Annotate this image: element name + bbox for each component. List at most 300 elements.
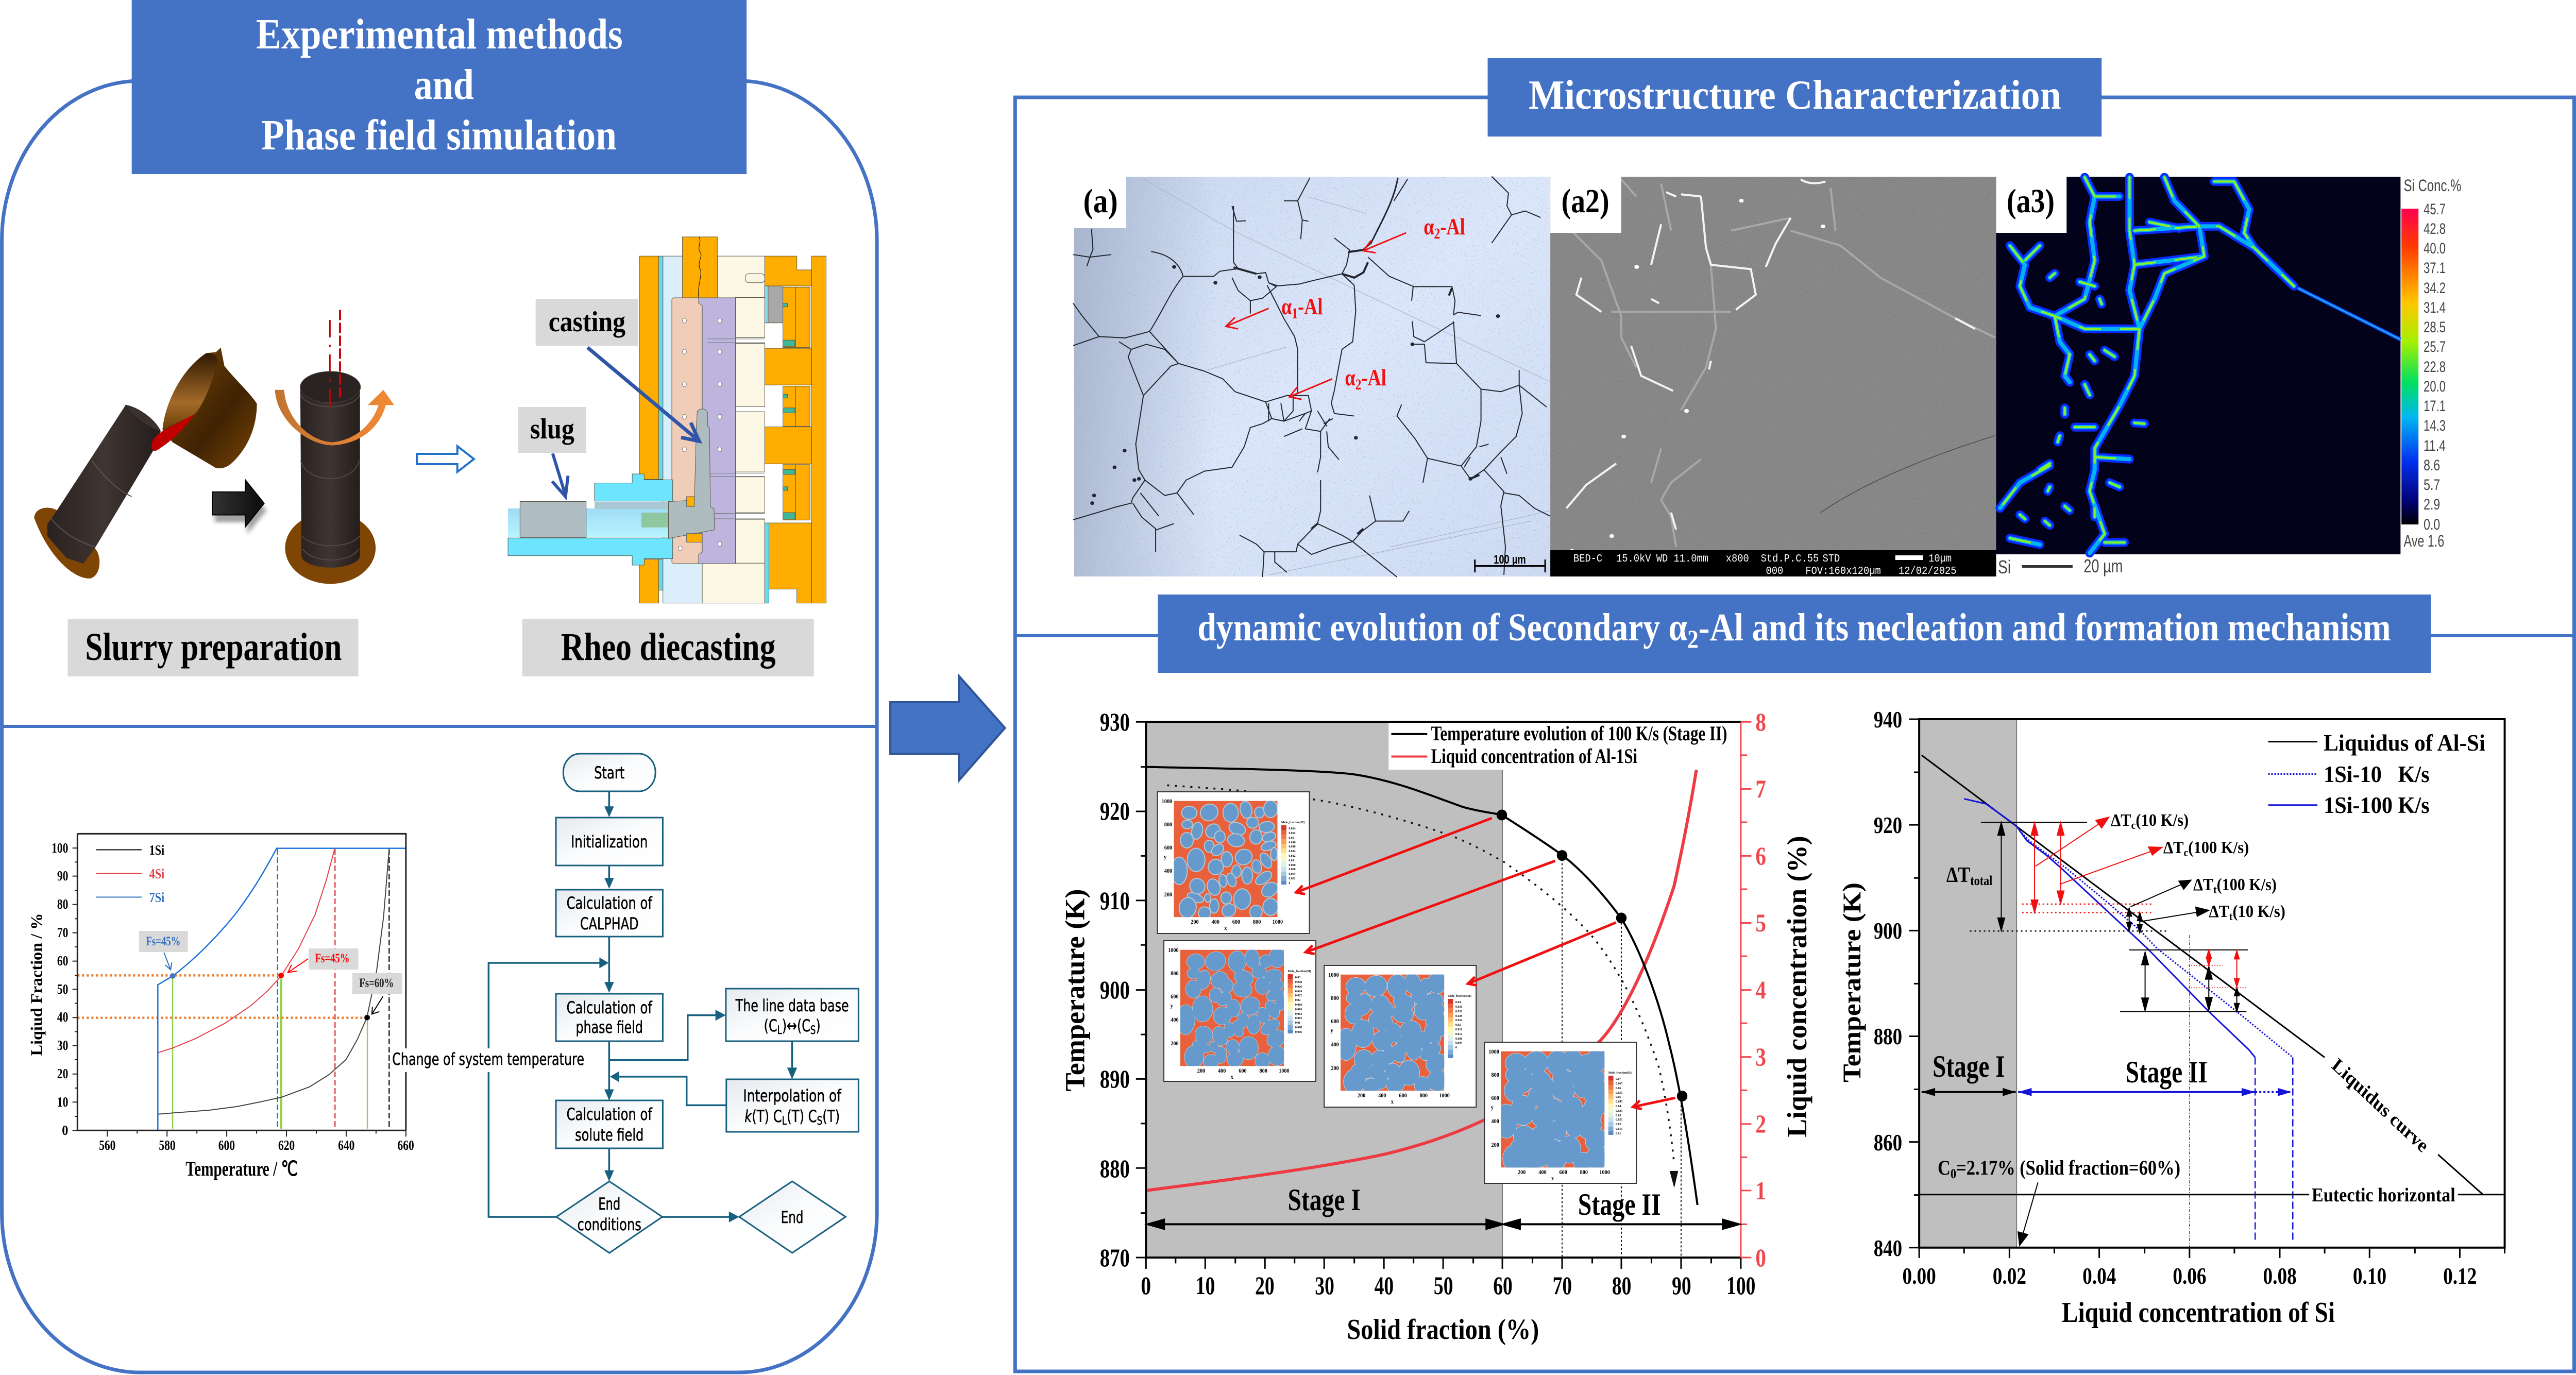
inset: solid fraction 60 percent: Mole_fraction(SI) [1281,821,1304,824]
node: calculation of solute field: solute field [575,1126,643,1145]
Si network [2000,177,2401,553]
bottom axis labels: 90 [1672,1272,1691,1300]
heading: dynamic evolution: 2 [1687,625,1699,654]
node: end conditions: conditions [578,1216,641,1234]
annotations: phase arrows: α [1281,294,1293,320]
inset: solid fraction 90 percent: x [1551,1176,1554,1182]
inset: solid fraction 60 percent: 1000 [1273,919,1283,925]
label box (a2) [1550,177,1621,233]
inset: solid fraction 70 percent: 0.01 [1295,1021,1300,1025]
inset: solid fraction 60 percent: 800 [1164,822,1173,828]
bottom axis labels: 30 [1315,1272,1334,1300]
colour bar: 8.6 [2424,457,2440,474]
colour bar: Ave 1.6 [2404,533,2444,550]
chart: liquid fraction vs temperature [28,834,414,1180]
stage spans: Stage I [1933,1049,2005,1084]
arrow: casting pointer [587,348,699,441]
annotations: phase arrows [1226,214,1465,399]
stage spans: Stage II [2126,1055,2208,1090]
bottom axis labels: 70 [1553,1272,1572,1300]
bottom axis labels: 0.06 [2173,1263,2207,1289]
inset: solid fraction 70 percent: 600 [1239,1068,1247,1074]
die halves [672,298,765,564]
inset: solid fraction 90 percent: 200 [1518,1169,1526,1176]
right axis labels: 7 [1755,775,1766,804]
inset: solid fraction 90 percent: 0.015 [1616,1127,1622,1131]
inset: solid fraction 80 percent: 600 [1331,1018,1339,1025]
panel: experimental methods and phase field simulation [2,81,877,1372]
inset: solid fraction 80 percent: 0.008 [1455,1037,1462,1041]
annotations: undercooling labels: (100 K/s) [2188,837,2249,857]
left axis labels: 930 [1100,708,1130,737]
stage spans: Stage II [1578,1187,1661,1222]
inset: solid fraction 70 percent: 0.014 [1295,1012,1302,1016]
plot area [1909,719,2505,1258]
inset: solid fraction 80 percent: 400 [1378,1093,1386,1099]
heading: experimental methods: Phase field simulation [261,111,617,159]
annotations: phase arrows: -Al [1361,365,1386,391]
left axis labels: 920 [1100,797,1130,826]
inset: solid fraction 60 percent: 0.024 [1289,827,1296,830]
node: interpolation: S [817,1114,822,1127]
heading: microstructure characterization [1488,58,2102,137]
stage spans [1922,1049,2291,1096]
inset: solid fraction 60 percent: 400 [1164,868,1173,874]
arrows: points to insets [1296,818,1675,1109]
inset: solid fraction 70 percent [1164,941,1316,1081]
colour bar: 5.7 [2424,477,2440,494]
stage spans [1148,1183,1739,1229]
left axis labels: 900 [1100,976,1130,1005]
inset: solid fraction 70 percent: 0.03 [1295,976,1300,979]
eutectic line: Eutectic horizontal [2312,1184,2455,1206]
inset: solid fraction 80 percent: 400 [1331,1042,1339,1048]
callouts: solid fraction markers [139,931,402,1014]
inset: solid fraction 80 percent: 0.028 [1455,1014,1462,1018]
bottom axis labels [1903,1263,2477,1289]
heading: microstructure characterization: Microstructure Characterization [1529,72,2061,118]
callout: C0: =2.17% (Solid fraction=60%) [1956,1157,2180,1179]
arrow: hollow process arrow [417,446,474,472]
axis tick labels [52,840,414,1153]
inset: solid fraction 60 percent: 0.016 [1289,845,1296,848]
inset: solid fraction 90 percent: 400 [1491,1118,1499,1125]
scale bar 20 um: 20 µm [2083,556,2123,576]
axis tick labels: 30 [57,1038,68,1053]
inset: solid fraction 80 percent: 0.016 [1455,1028,1462,1031]
inset: solid fraction 90 percent: 0.025 [1616,1118,1622,1122]
node: calculation of phase field [556,994,663,1041]
SEM info bar: x800 [1726,552,1749,565]
inset: solid fraction 60 percent: 400 [1211,919,1219,925]
inset: solid fraction 60 percent: 0.012 [1289,854,1296,858]
inset: solid fraction 60 percent: 0.018 [1289,841,1296,844]
micrograph (a): optical microstructure [1073,176,1552,577]
legend [1388,722,1740,770]
inset: solid fraction 70 percent: 200 [1197,1068,1206,1074]
arrow: main flow to results [890,676,1005,780]
colour bar: 22.8 [2424,359,2446,376]
bottom axis labels: 60 [1493,1272,1513,1300]
axis tick labels: 580 [159,1138,176,1153]
icon: pouring ladle [151,348,257,468]
inset: solid fraction 70 percent: 400 [1218,1068,1226,1074]
inset: solid fraction 80 percent: 0.024 [1455,1018,1463,1022]
legend: 1Si [149,842,164,858]
inset: solid fraction 80 percent: 0.036 [1455,1005,1462,1009]
left axis labels: 860 [1874,1130,1902,1156]
inset: solid fraction 60 percent: 0.022 [1289,831,1296,835]
dendrite boundaries [1566,179,1995,551]
inset: solid fraction 90 percent: 0.06 [1616,1087,1621,1090]
legend: 1Si-100 K/s [2324,792,2430,819]
left axis labels [1100,708,1130,1272]
illustration: slurry preparation crucibles [34,310,394,584]
SEM info bar: WD 11.0mm [1656,552,1708,565]
inset: solid fraction 60 percent: 0.01 [1289,859,1294,862]
annotations: phase arrows: α [1423,214,1435,240]
inset: solid fraction 90 percent: 0.04 [1616,1105,1621,1108]
left axis labels: 840 [1874,1235,1902,1262]
inset: solid fraction 70 percent: 1000 [1168,947,1179,954]
axis tick labels: 620 [278,1138,295,1153]
inset: solid fraction 90 percent: 0.055 [1616,1091,1622,1095]
flowchart: solidification simulation [391,754,858,1253]
arrow: slug pointer [552,453,568,497]
left axis labels: 880 [1874,1024,1902,1050]
inset: solid fraction 80 percent: 800 [1420,1093,1428,1099]
shot sleeve and slug [508,409,715,565]
node: line data base: L [777,1024,782,1037]
colour bar: 25.7 [2424,338,2446,355]
label: casting: casting [549,307,625,338]
panel: microstructure and mechanism frame [1015,97,2574,1371]
scale bar 20 um: Si [1998,557,2011,578]
node: initialization: Initialization [571,833,648,852]
inset: solid fraction 90 percent: 0.01 [1616,1132,1621,1135]
left axis labels: 920 [1874,812,1902,839]
inset: solid fraction 80 percent: 800 [1331,995,1339,1001]
bottom axis labels [1141,1272,1755,1300]
inset: solid fraction 80 percent: x [1391,1099,1394,1105]
inset: solid fraction 90 percent: 400 [1538,1169,1547,1176]
label: casting [536,299,638,346]
inset: solid fraction 80 percent: 0.02 [1455,1023,1461,1027]
micrograph (a2): SEM image [1550,177,1996,577]
inset: solid fraction 80 percent: 200 [1331,1065,1339,1072]
bottom axis labels: 0.08 [2263,1263,2297,1289]
inset: solid fraction 70 percent: Mole_fraction(SI) [1288,970,1311,973]
colour bar: Si Conc.% [2404,177,2461,195]
colour bar: 34.2 [2424,280,2446,297]
annotations: undercooling labels: ΔT [2209,901,2229,921]
colour bar: 37.1 [2424,260,2446,277]
SEM info bar: 10µm [1928,552,1952,565]
SEM info bar: 000 [1766,565,1783,577]
bottom axis labels: 50 [1434,1272,1453,1300]
axis title: temperature K: Temperature (K) [1060,889,1091,1092]
heading: dynamic evolution: -Al and its necleation and formation mechanism [1699,606,2391,649]
left axis labels [1874,707,1902,1262]
axis tick labels: 90 [57,868,68,884]
inset: solid fraction 70 percent: 0.024 [1295,990,1302,993]
inset: solid fraction 70 percent: 400 [1171,1017,1179,1023]
node: calculation of CALPHAD [556,890,663,937]
legend: 1Si-10 K/s [2324,761,2430,788]
loop label: change of system temperature [391,1048,586,1072]
node: interpolation: (T) C [787,1108,817,1126]
axis tick labels: 80 [57,896,68,912]
bottom axis labels: 10 [1196,1272,1215,1300]
inset: solid fraction 70 percent: 0.02 [1295,998,1300,1002]
node: start [563,754,655,791]
right axis labels: 4 [1755,976,1766,1005]
colour bar: 17.1 [2424,398,2446,415]
left axis labels: 870 [1100,1244,1130,1272]
label: rheo diecasting [522,619,814,676]
inset: solid fraction 60 percent: 200 [1191,919,1199,925]
inset: solid fraction 70 percent: y [1171,1003,1173,1009]
callouts: solid fraction markers: Fs=45% [146,935,180,948]
inset: solid fraction 60 percent: 0.008 [1289,863,1296,867]
icon: upright crucible [285,310,376,584]
SEM info bar: FOV:160x120µm [1805,565,1881,577]
node: initialization [556,818,663,865]
axis tick labels: 0 [62,1123,68,1138]
annotations: undercooling labels: ΔT [1946,863,1972,887]
node: line data base: (C [764,1017,780,1036]
node: interpolation [726,1079,858,1132]
inset: solid fraction 90 percent: 600 [1559,1169,1567,1176]
colour bar: 31.4 [2424,299,2446,316]
inset: solid fraction 70 percent: 0.022 [1295,994,1302,997]
icon: tilted crucible [34,405,161,579]
annotations: undercooling labels: c [2184,846,2188,859]
colour bar: 20.0 [2424,378,2446,395]
axis tick labels: 40 [57,1009,68,1025]
legend: Liquid concentration of Al-1Si [1431,745,1637,768]
colour bar [2401,177,2461,550]
callout: C0: 0 [1951,1167,1956,1181]
node: interpolation: L [782,1114,787,1127]
bottom axis labels: 0.00 [1903,1263,1936,1289]
inset: solid fraction 90 percent: 0.03 [1616,1114,1621,1117]
inset: solid fraction 80 percent: 0.032 [1455,1010,1462,1013]
annotations: undercooling labels: t [2213,883,2217,896]
inset: solid fraction 90 percent: 600 [1491,1095,1499,1101]
inset: solid fraction 90 percent [1484,1042,1636,1183]
colour bar: 28.5 [2424,319,2446,336]
axis tick labels: 640 [338,1138,354,1153]
node: end conditions: End [598,1195,620,1214]
inset: solid fraction 60 percent: 0.014 [1289,850,1296,853]
right axis labels: 3 [1755,1043,1766,1072]
panel letter (a2): (a2) [1562,182,1609,220]
colour bar: 40.0 [2424,240,2446,257]
inset: solid fraction 90 percent: 0.045 [1616,1100,1622,1104]
label: slurry preparation [67,619,359,676]
inset: solid fraction 80 percent: y [1331,1028,1333,1034]
plot area [73,834,406,1136]
inset: solid fraction 70 percent: 0.026 [1295,985,1302,989]
axis tick labels: 60 [57,953,68,969]
inset: solid fraction 80 percent: 0.004 [1455,1041,1463,1045]
inset: solid fraction 90 percent: 200 [1491,1142,1499,1148]
inset: solid fraction 70 percent: 0.012 [1295,1016,1302,1020]
annotations: undercooling labels: (100 K/s) [2217,874,2277,894]
inset: solid fraction 60 percent: 0.002 [1289,877,1296,880]
loop label: change of system temperature: Change of system temperature [392,1050,584,1069]
node: line data base [726,989,858,1041]
inset: solid fraction 70 percent: 0.006 [1295,1030,1302,1034]
annotations: undercooling labels: t [2229,910,2233,923]
annotations: phase arrows: α [1345,365,1357,391]
inset: solid fraction 60 percent: x [1224,925,1227,931]
left axis labels: 890 [1100,1065,1130,1094]
inset: solid fraction 60 percent [1158,792,1310,933]
right axis labels: 8 [1755,708,1766,737]
legend: 7Si [149,890,164,905]
inset: solid fraction 60 percent: y [1164,854,1167,860]
node: interpolation: (T) [822,1108,840,1126]
inset: solid fraction 90 percent: 800 [1580,1169,1588,1176]
label: rheo diecasting: Rheo diecasting [561,625,775,669]
node: calculation of CALPHAD: Calculation of [567,894,653,913]
inset: solid fraction 70 percent: 0.018 [1295,1003,1302,1007]
axis tick labels: 50 [57,981,68,997]
inset: solid fraction 60 percent: 600 [1164,845,1173,851]
inset: solid fraction 70 percent: 1000 [1279,1068,1290,1074]
annotations: undercooling labels: (10 K/s) [2136,810,2189,829]
inset: solid fraction 60 percent: 0 [1289,881,1290,885]
connectors [488,791,797,1223]
bottom axis labels: 20 [1255,1272,1275,1300]
right axis labels: 0 [1755,1244,1766,1272]
inset: solid fraction 80 percent: 0 [1455,1046,1457,1049]
right axis labels: 5 [1755,909,1766,938]
inset: solid fraction 60 percent: 800 [1253,919,1261,925]
label: slug: slug [530,414,574,445]
colour bar: 45.7 [2424,201,2446,218]
right axis labels: 2 [1755,1110,1766,1139]
right axis labels: 1 [1755,1177,1766,1206]
inset: solid fraction 90 percent: 0.02 [1616,1123,1621,1126]
annotations: undercooling labels [1946,810,2285,923]
annotations: phase arrows: -Al [1440,214,1465,240]
inset: solid fraction 60 percent: 200 [1164,892,1173,898]
chart: temperature vs liquid concentration of Si [1838,707,2505,1329]
bottom axis labels: 0.12 [2443,1263,2477,1289]
inset: solid fraction 70 percent: 200 [1171,1041,1179,1047]
axis tick labels: 660 [398,1138,414,1153]
node: end conditions [556,1181,663,1253]
SEM info bar: Std.P.C.55 [1761,552,1819,565]
right axis labels: 6 [1755,842,1766,871]
colour bar: 42.8 [2424,220,2446,237]
left axis labels: 900 [1874,918,1902,944]
stage spans: Stage I [1288,1183,1361,1217]
inset: solid fraction 90 percent: 0.035 [1616,1109,1622,1113]
callout: C0: C [1938,1157,1951,1179]
chart: temperature and liquid concentration vs solid fraction [1060,708,1812,1346]
node: interpolation: k(T) C [744,1108,787,1126]
heading: experimental methods: Experimental methods [256,10,623,58]
arrow: black process arrow [212,480,266,534]
annotations: undercooling labels: ΔT [2193,874,2213,894]
heading: dynamic evolution [1158,595,2431,673]
inset: solid fraction 90 percent: 800 [1491,1072,1499,1078]
scale bar 100 um [1475,552,1545,572]
legend [2268,730,2485,819]
node: start: Start [594,764,624,783]
inset: solid fraction 80 percent: 0.04 [1455,1000,1461,1004]
inset: solid fraction 90 percent: 1000 [1599,1169,1610,1176]
axis tick labels: 10 [57,1094,68,1110]
node: line data base: The line data base [735,997,849,1015]
inset: solid fraction 60 percent: 1000 [1162,799,1173,805]
inset: solid fraction 90 percent: Mole_fraction(SI) [1608,1071,1632,1075]
annotations: undercooling labels: (10 K/s) [2233,901,2285,921]
node: calculation of solute field: Calculation of [567,1106,653,1124]
axis title: liquid concentration: Liquid concentration (%) [1782,836,1812,1138]
node: line data base: S [810,1024,816,1037]
inset: solid fraction 90 percent: 0.07 [1616,1077,1621,1081]
inset: solid fraction 80 percent: 1000 [1328,972,1339,978]
inset: solid fraction 70 percent: 800 [1259,1068,1267,1074]
node: calculation of phase field: Calculation of [567,999,653,1017]
heading: dynamic evolution: dynamic evolution of Secondary α [1197,606,1705,649]
plot area [1136,722,1751,1269]
legend: Liquidus of Al-Si [2324,730,2485,756]
axis tick labels: 100 [52,840,68,856]
annotations: undercooling labels: c [2131,819,2136,831]
node: calculation of CALPHAD: CALPHAD [580,915,638,933]
inset: solid fraction 80 percent: 200 [1358,1093,1366,1099]
scale bar 100 um: 100 µm [1494,552,1526,566]
axis title: temperature: Temperature / ℃ [185,1158,298,1180]
inset: solid fraction 60 percent: 600 [1232,919,1241,925]
inset: solid fraction 80 percent: 0.012 [1455,1032,1462,1036]
bottom axis labels: 80 [1612,1272,1631,1300]
grain network [1073,176,1552,577]
node: calculation of solute field [556,1100,663,1148]
inset: solid fraction 70 percent: 0.008 [1295,1026,1302,1029]
inset: solid fraction 70 percent: 0.016 [1295,1008,1302,1011]
annotations: phase arrows: 1 [1292,305,1298,322]
inset: solid fraction 80 percent: 600 [1399,1093,1407,1099]
colour bar: 11.4 [2424,437,2446,454]
inset: solid fraction 70 percent: 0.028 [1295,980,1302,984]
colour bar: 14.3 [2424,417,2446,434]
undercooling arrows [1998,817,2239,1245]
SEM info bar [1550,550,1996,577]
colour bar: 0.0 [2424,516,2440,533]
panel letter (a): (a) [1083,182,1118,220]
SEM info bar: BED-C [1573,552,1602,565]
scale bar 20 um [1998,556,2123,578]
bottom axis labels: 0.10 [2353,1263,2386,1289]
callouts: solid fraction markers: Fs=60% [359,976,394,990]
annotations: undercooling labels: total [1970,874,1992,888]
axis title: liquid concentration of Si: Liquid concentration of Si [2062,1297,2335,1329]
panel letter (a3): (a3) [2007,182,2055,220]
label box (a3) [1996,177,2066,233]
label: slug [518,407,586,453]
inset: solid fraction 60 percent: 0.004 [1289,872,1296,876]
heading: experimental methods [132,0,747,174]
axis tick labels: 20 [57,1066,68,1081]
illustration: rheo diecasting mould [508,237,826,603]
